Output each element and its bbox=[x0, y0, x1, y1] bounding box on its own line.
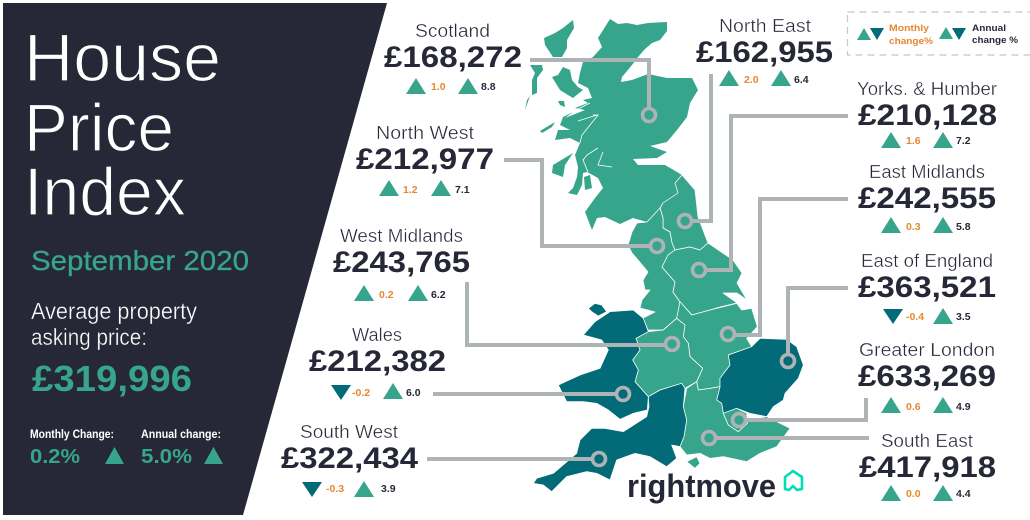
region: Wales: Wales bbox=[352, 325, 402, 345]
monthly change: Monthly Change: bbox=[30, 429, 114, 441]
region: Greater London bbox=[858, 340, 996, 413]
region: Yorks and Humber: 7.2 bbox=[956, 135, 971, 147]
region: Greater London: £633,269 bbox=[858, 360, 996, 393]
connector: North East bbox=[678, 74, 711, 228]
region: North East: North East bbox=[719, 16, 811, 36]
average price label: asking price: bbox=[31, 324, 147, 350]
decorative lochs bbox=[572, 103, 612, 172]
map: South East bbox=[680, 382, 790, 468]
map: Yorkshire and Humber bbox=[662, 243, 747, 315]
connector: Scotland bbox=[530, 60, 656, 122]
map: East Midlands bbox=[677, 302, 757, 390]
map: North West bbox=[628, 208, 680, 330]
region: South East: 4.4 bbox=[956, 488, 971, 500]
legend: Annual bbox=[972, 23, 1006, 34]
region: West Midlands: West Midlands bbox=[340, 226, 463, 246]
map: East of England bbox=[717, 338, 803, 417]
region: Yorks and Humber: £210,128 bbox=[858, 99, 997, 132]
region: Scotland: 8.8 bbox=[481, 81, 496, 93]
region: Greater London: Greater London bbox=[859, 340, 995, 360]
map: Greater London bbox=[723, 408, 747, 432]
region: West Midlands: 6.2 bbox=[431, 289, 446, 301]
average price label bbox=[31, 298, 197, 350]
region: Yorks and Humber: 1.6 bbox=[906, 135, 921, 147]
region: South West: -0.3 bbox=[326, 483, 344, 495]
annual change: Annual change: bbox=[141, 429, 221, 441]
legend: Monthly bbox=[889, 23, 930, 34]
legend: change% bbox=[889, 36, 934, 47]
region: North East bbox=[696, 16, 833, 86]
connector: Greater London bbox=[732, 398, 866, 426]
region: East of England: 3.5 bbox=[956, 311, 971, 323]
region: Scotland: £168,272 bbox=[384, 41, 522, 74]
region: North West bbox=[356, 123, 494, 196]
region: West Midlands: 0.2 bbox=[379, 289, 394, 301]
region: North East: 2.0 bbox=[744, 74, 759, 86]
region: South East: £417,918 bbox=[859, 451, 996, 484]
monthly change bbox=[30, 429, 124, 468]
icon: house outline bbox=[785, 471, 802, 490]
map: West Midlands bbox=[633, 318, 703, 397]
region: East of England: £363,521 bbox=[858, 271, 996, 304]
region: East Midlands: 5.8 bbox=[956, 221, 971, 233]
region: East Midlands: £242,555 bbox=[858, 182, 996, 215]
region: Yorks and Humber: Yorks. & Humber bbox=[857, 79, 997, 99]
region: East of England: East of England bbox=[861, 251, 993, 271]
region: Wales bbox=[309, 325, 446, 400]
map: North East bbox=[660, 175, 708, 250]
logo: rightmove: rightmove bbox=[627, 468, 776, 504]
region: Scotland bbox=[384, 21, 522, 94]
average price label: Average property bbox=[31, 298, 197, 324]
map: South West bbox=[533, 383, 687, 492]
annual change bbox=[141, 429, 223, 468]
region: North West: 1.2 bbox=[403, 184, 418, 196]
region: North East: 6.4 bbox=[794, 74, 809, 86]
title: Price bbox=[24, 90, 174, 166]
region: South West bbox=[281, 422, 418, 497]
region: South West: South West bbox=[300, 422, 398, 442]
region: Greater London: 0.6 bbox=[906, 401, 921, 413]
title bbox=[24, 20, 221, 230]
connector: East of England bbox=[782, 288, 848, 368]
region: South West: £322,434 bbox=[281, 442, 418, 475]
title: Index bbox=[24, 154, 186, 230]
region: North West: North West bbox=[376, 123, 474, 143]
region: South East: 0.0 bbox=[906, 488, 921, 500]
region: East Midlands: East Midlands bbox=[869, 162, 985, 182]
region: Wales: 6.0 bbox=[406, 387, 421, 399]
average price value: £319,996 bbox=[32, 358, 192, 399]
connector: South West bbox=[427, 452, 606, 466]
connector: Wales bbox=[433, 388, 630, 400]
map: Scotland bbox=[525, 19, 698, 230]
map: Wales bbox=[558, 303, 648, 419]
connector: East Midlands bbox=[722, 199, 848, 340]
region: East Midlands bbox=[858, 162, 996, 233]
connector: South East bbox=[702, 432, 869, 444]
region: Greater London: 4.9 bbox=[956, 401, 971, 413]
legend: change % bbox=[972, 35, 1019, 46]
legend bbox=[848, 12, 1030, 55]
region: South East: South East bbox=[881, 431, 973, 451]
region: Yorks and Humber bbox=[857, 79, 997, 148]
region: East of England bbox=[858, 251, 996, 324]
annual change: 5.0% bbox=[141, 446, 192, 468]
region: Wales: -0.2 bbox=[352, 387, 370, 399]
region: East of England: -0.4 bbox=[906, 311, 924, 323]
map of Great Britain bbox=[525, 19, 803, 492]
region: East Midlands: 0.3 bbox=[906, 221, 921, 233]
panel: summary bbox=[3, 3, 387, 515]
region: West Midlands: £243,765 bbox=[333, 246, 470, 279]
region: North West: 7.1 bbox=[455, 184, 470, 196]
region: North East: £162,955 bbox=[696, 36, 833, 69]
connector: West Midlands bbox=[467, 282, 678, 350]
region: West Midlands bbox=[333, 226, 470, 301]
region: Scotland: Scotland bbox=[415, 21, 490, 41]
map: Scottish islands bbox=[525, 20, 592, 190]
region: South West: 3.9 bbox=[381, 483, 396, 495]
region: Wales: £212,382 bbox=[309, 345, 446, 378]
monthly change: 0.2% bbox=[30, 446, 80, 468]
region: North West: £212,977 bbox=[356, 143, 494, 176]
region: Scotland: 1.0 bbox=[431, 81, 446, 93]
title: House bbox=[24, 20, 221, 96]
region: South East bbox=[859, 431, 996, 501]
date heading: September 2020 bbox=[31, 245, 249, 276]
connector: North West bbox=[504, 160, 664, 252]
connector: Yorks and Humber bbox=[692, 116, 848, 276]
